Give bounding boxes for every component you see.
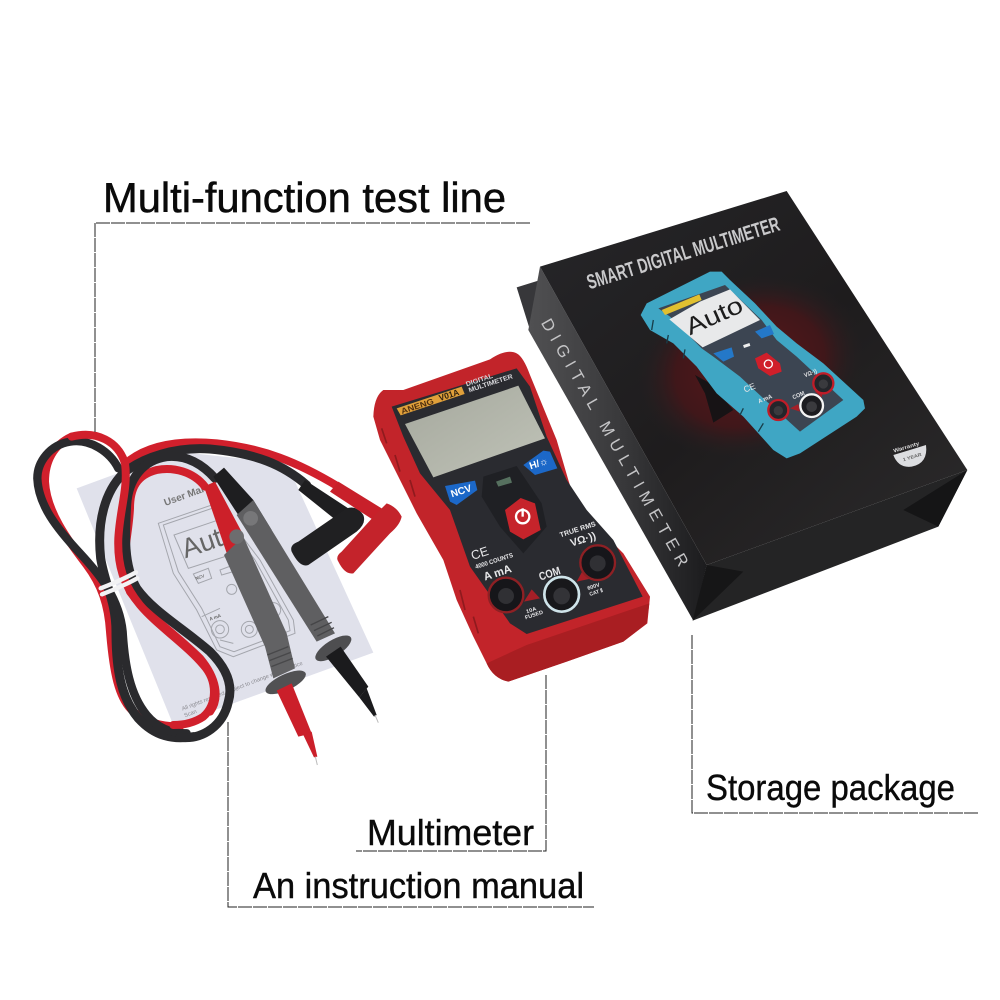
left jack labels: 4000 COUNTS — [474, 552, 514, 571]
red lead to probe — [124, 469, 216, 712]
left jack labels: CE — [469, 544, 490, 563]
right jack labels: CAT Ⅱ — [588, 587, 604, 598]
NCV button: NCV — [450, 483, 474, 500]
right jack labels — [559, 521, 604, 598]
fuse label: 10A — [525, 606, 538, 615]
red loop right — [72, 435, 214, 725]
box meter labels — [742, 369, 818, 405]
box title: SMART DIGITAL MULTIMETER — [584, 213, 783, 294]
brand label: V01A — [438, 387, 461, 403]
multimeter — [373, 352, 650, 682]
left jack labels: A mA — [482, 563, 513, 584]
H button: H/☼ — [528, 456, 550, 472]
right jack labels: TRUE RMS — [559, 521, 597, 539]
manual small labels: All rights reserved, subject to change without notice — [181, 661, 304, 713]
manual small labels: NCV — [195, 573, 205, 581]
right jack labels: VΩ·)) — [569, 530, 598, 550]
NCV button — [445, 481, 477, 505]
box meter illustration — [641, 272, 865, 458]
box meter labels: COM — [792, 391, 806, 401]
instruction manual sheet — [77, 452, 373, 725]
black lead to probe — [126, 456, 230, 738]
box meter labels: VΩ·)) — [803, 369, 818, 379]
warranty badge: Warranty — [893, 441, 920, 455]
label: an instruction manual: An instruction manual — [253, 865, 584, 906]
warranty badge — [893, 441, 926, 467]
manual small labels: Scan — [184, 709, 198, 719]
manual small labels — [181, 573, 304, 719]
red plug — [330, 482, 402, 574]
power button — [505, 498, 541, 539]
box meter display text: Auto — [681, 292, 747, 341]
black probe — [213, 468, 378, 723]
control cluster — [482, 466, 547, 553]
brand label — [397, 387, 465, 416]
red loop left — [45, 437, 180, 727]
label: storage package — [692, 635, 978, 813]
storage package box — [517, 191, 967, 621]
red probe — [204, 482, 317, 765]
LCD display — [405, 386, 545, 477]
black plug — [291, 480, 364, 566]
label: multi-function test line — [95, 174, 530, 432]
input jacks — [489, 545, 615, 612]
label: an instruction manual — [228, 722, 594, 907]
black loop — [37, 441, 187, 733]
meter face — [392, 368, 643, 634]
label: multimeter: Multimeter — [367, 812, 534, 853]
multi-function test leads — [37, 435, 338, 738]
box meter labels: A mA — [758, 394, 774, 405]
black lead to right plug — [100, 449, 307, 738]
left jack labels — [469, 544, 514, 584]
COM label: COM — [538, 565, 562, 584]
right-angle plugs — [291, 480, 402, 574]
red lead to right plug — [130, 442, 338, 487]
right jack labels: 600V — [587, 582, 601, 592]
manual small labels: A mA — [209, 613, 222, 622]
manual display text: Auto — [177, 516, 240, 564]
box meter labels: CE — [742, 381, 757, 395]
model description: DIGITAL — [465, 373, 494, 388]
meter casing — [373, 352, 650, 682]
box side label: DIGITAL MULTIMETER — [537, 315, 692, 570]
brand label: ANENG — [400, 397, 435, 416]
test probes — [204, 468, 378, 765]
manual meter line drawing — [158, 503, 295, 657]
H button — [523, 451, 557, 475]
label: storage package: Storage package — [706, 767, 955, 808]
cable tie — [101, 572, 137, 594]
label: multi-function test line: Multi-function test line — [103, 174, 506, 221]
warranty badge: 1 YEAR — [902, 452, 923, 462]
label: multimeter — [356, 675, 546, 853]
model description: MULTIMETER — [468, 373, 514, 394]
fuse label: FUSED — [524, 610, 544, 621]
manual heading: User Man — [163, 483, 209, 509]
warning triangles — [524, 589, 540, 602]
